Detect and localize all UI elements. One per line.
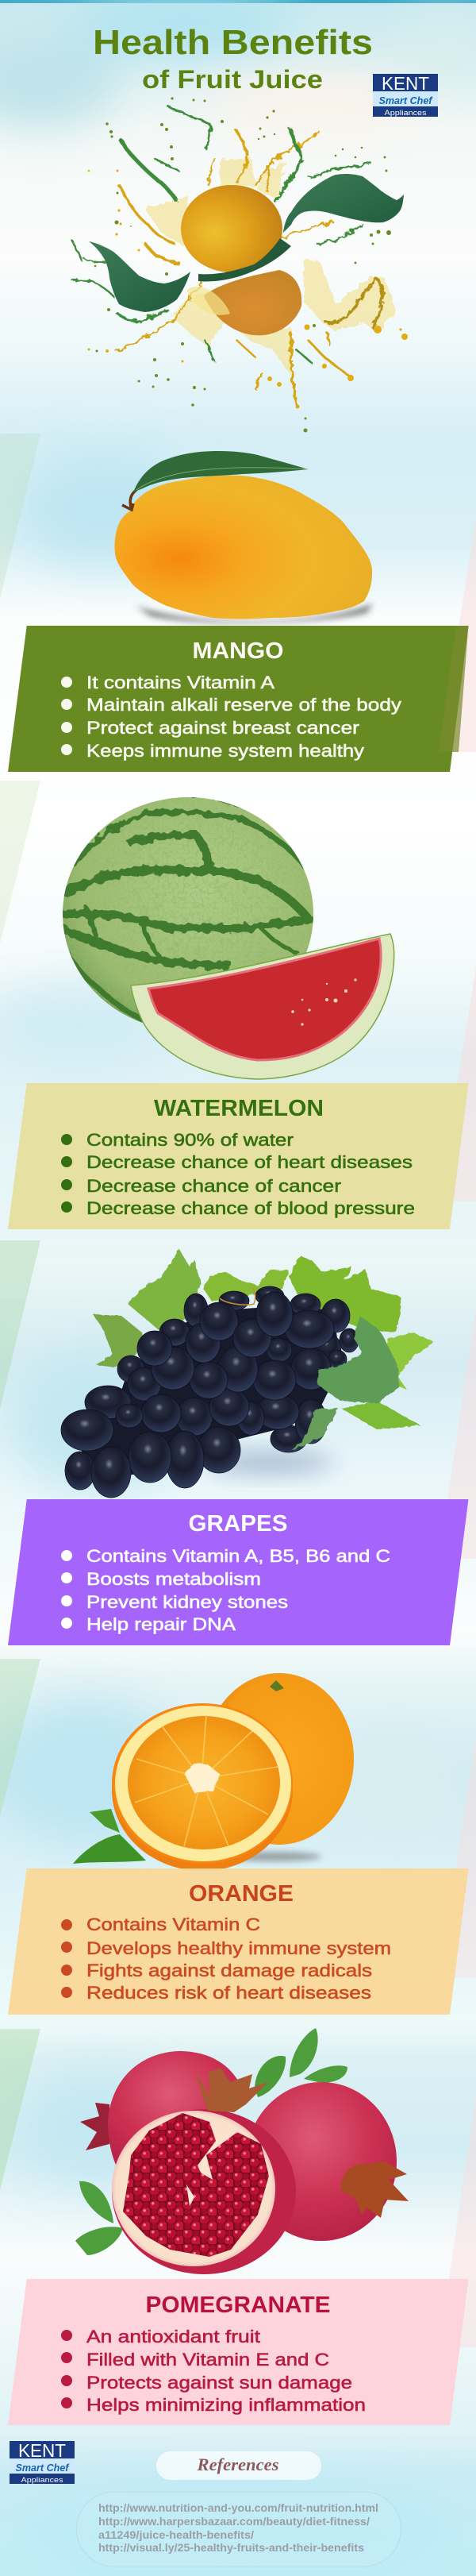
KENT logo: Appliances (384, 109, 427, 117)
references heading pill: References (196, 2455, 279, 2474)
benefits list: Keeps immune system healthy (86, 741, 364, 761)
footer KENT logo: Smart Chef (16, 2462, 70, 2474)
icon: pomegranate seeds (123, 2113, 269, 2257)
background tint: left green and right pink slanted bands (0, 434, 476, 2347)
icon: cut orange half (112, 1709, 293, 1871)
orange illustration (73, 1673, 354, 1871)
icon: top crown (194, 2068, 268, 2112)
title: Health Benefits (93, 23, 373, 62)
panel: orange (8, 1868, 468, 2015)
benefits list: Decrease chance of blood pressure (86, 1198, 415, 1218)
title: of Fruit Juice (142, 65, 323, 94)
icon: cut pomegranate (112, 2109, 296, 2274)
benefits list: Protect against breast cancer (86, 718, 359, 738)
benefits list (61, 1915, 391, 2003)
panel: pomegranate (8, 2279, 468, 2425)
references list: http://www.harpersbazaar.com/beauty/diet-fitness/ (98, 2515, 370, 2528)
benefits list: Decrease chance of heart diseases (86, 1152, 413, 1172)
footer KENT logo (10, 2440, 75, 2484)
benefits list (61, 2327, 366, 2415)
benefits list: Maintain alkali reserve of the body (86, 695, 401, 715)
benefits list (61, 1546, 390, 1634)
icon: watermelon slice rind (131, 934, 394, 1079)
benefits list: It contains Vitamin A (86, 673, 274, 692)
icon: whole orange (205, 1673, 354, 1845)
benefits list (61, 1130, 415, 1218)
benefits list: An antioxidant fruit (86, 2327, 260, 2347)
icon: right leaf (283, 174, 404, 233)
benefits list: Boosts metabolism (86, 1569, 261, 1589)
icon: mango stem (122, 490, 136, 510)
icon: leaf band around orange (198, 238, 291, 281)
references list: http://www.nutrition-and-you.com/fruit-nutrition.html (98, 2501, 378, 2514)
benefits list: Fights against damage radicals (86, 1961, 372, 1980)
icon: watermelon slice flesh (148, 939, 381, 1060)
benefits list: Develops healthy immune system (86, 1938, 391, 1958)
icon: left leaf (89, 241, 190, 312)
footer KENT logo: KENT (18, 2440, 66, 2461)
panel: grapes (8, 1499, 468, 1645)
icon: orange leaves (90, 1809, 120, 1833)
KENT logo: Smart Chef (379, 94, 433, 106)
references list: http://visual.ly/25-healthy-fruits-and-their-benefits (98, 2541, 364, 2554)
panel: mango (8, 626, 468, 772)
icon: front grape leaf (291, 1316, 399, 1451)
heading: WATERMELON (154, 1096, 324, 1121)
watermelon illustration (56, 794, 394, 1079)
panel: watermelon (8, 1083, 468, 1229)
icon: lower orange (204, 270, 301, 335)
heading: GRAPES (189, 1511, 287, 1537)
icon: grape leaves (93, 1249, 434, 1429)
benefits list: Protects against sun damage (86, 2373, 352, 2393)
KENT logo: KENT (382, 73, 429, 94)
heading: POMEGRANATE (146, 2293, 330, 2318)
KENT logo (373, 73, 438, 117)
grapes illustration (61, 1249, 434, 1498)
mango illustration (114, 451, 373, 623)
juice splash illustration (71, 97, 408, 433)
benefits list: Contains Vitamin C (86, 1915, 260, 1934)
references heading pill (156, 2451, 321, 2480)
icon: pomegranate leaves (255, 2056, 286, 2097)
benefits list: Help repair DNA (86, 1614, 236, 1634)
references list (76, 2492, 401, 2566)
icon: grape bunch (79, 1308, 341, 1477)
benefits list: Helps minimizing inflammation (86, 2395, 366, 2415)
icon: grape tendril (220, 1288, 255, 1305)
benefits list: Contains Vitamin A, B5, B6 and C (86, 1546, 390, 1566)
benefits list: Filled with Vitamin E and C (86, 2350, 329, 2370)
heading: ORANGE (189, 1881, 294, 1907)
icon: mango leaf (133, 451, 308, 492)
icon: upper orange (181, 185, 282, 272)
icon: watermelon stripes (56, 794, 309, 1031)
icon: right pomegranate (246, 2082, 397, 2241)
icon: right calyx (341, 2161, 409, 2218)
benefits list: Contains 90% of water (86, 1130, 294, 1150)
title (93, 23, 373, 94)
pomegranate illustration (75, 2028, 409, 2274)
heading: MANGO (192, 638, 284, 664)
benefits list: Prevent kidney stones (86, 1592, 288, 1612)
benefits list: Reduces risk of heart diseases (86, 1983, 371, 2003)
benefits list (61, 673, 401, 761)
benefits list: Decrease chance of cancer (86, 1176, 341, 1196)
footer KENT logo: Appliances (21, 2476, 63, 2484)
icon: left calyx (80, 2103, 109, 2150)
icon: back pomegranate (108, 2051, 246, 2172)
references list: a11249/juice-health-benefits/ (98, 2528, 254, 2541)
icon: mango body (114, 476, 372, 619)
